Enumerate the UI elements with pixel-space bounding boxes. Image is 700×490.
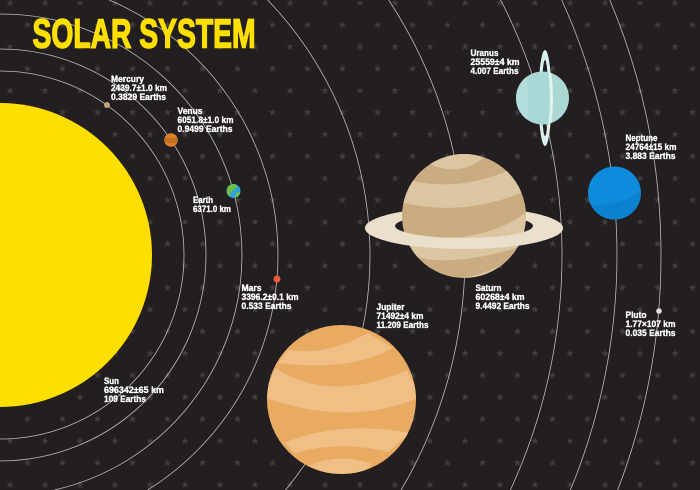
label: earth: Earth [193,195,213,206]
title: SOLAR SYSTEM [32,10,255,56]
label: mars: Mars [242,283,262,294]
label: neptune: 24764±15 km [626,142,676,153]
label: jupiter [376,302,428,331]
uranus ring back [538,50,552,146]
label: uranus [470,48,520,77]
label: sun: 696342±65 km [104,385,164,396]
label: mars [242,283,298,312]
label: saturn: Saturn [476,283,502,294]
planet: saturn [365,150,563,285]
saturn ring back [365,207,563,249]
label: venus: 6051.8±1.0 km [178,115,234,126]
label: uranus: 4.007 Earths [470,66,518,77]
label: neptune [626,133,676,162]
planet: earth [226,184,240,198]
label: saturn [476,283,530,312]
label: mars: 0.533 Earths [242,301,292,312]
label: venus: Venus [178,106,202,117]
label: jupiter: Jupiter [376,302,405,313]
label: venus [178,106,234,135]
label: mercury: 2439.7±1.0 km [111,83,167,94]
planet: pluto [656,308,662,314]
label: saturn: 60268±4 km [476,292,524,303]
label: sun: 109 Earths [104,394,146,405]
label: pluto: Pluto [626,310,647,321]
planet: mars [274,276,280,282]
label: jupiter: 11.209 Earths [376,320,428,331]
label: jupiter: 71492±4 km [376,311,424,322]
label: sun [104,376,164,405]
label: venus: 0.9499 Earths [178,124,232,135]
planet: neptune [588,166,641,222]
label: pluto: 0.035 Earths [626,328,676,339]
label: mercury [111,74,167,103]
label: neptune: 3.883 Earths [626,151,676,162]
planet: mercury [104,102,110,108]
saturn ring front [365,226,563,249]
label: uranus: Uranus [470,48,498,59]
label: neptune: Neptune [626,133,658,144]
sun [0,103,152,407]
label: mercury: Mercury [111,74,145,85]
label: saturn: 9.4492 Earths [476,301,530,312]
label: pluto: 1.77×107 km [626,319,676,330]
label: mercury: 0.3829 Earths [111,92,166,103]
label: uranus: 25559±4 km [470,57,520,68]
saturn globe [402,154,526,278]
planet: jupiter [263,325,420,476]
label: pluto [626,310,676,339]
label: earth: 6371.0 km [193,204,231,215]
uranus globe [516,72,569,124]
label: sun: Sun [104,376,119,387]
label: mars: 3396.2±0.1 km [242,292,298,303]
planet: uranus [516,50,569,146]
planet: venus [164,133,178,147]
label: earth [193,195,231,215]
